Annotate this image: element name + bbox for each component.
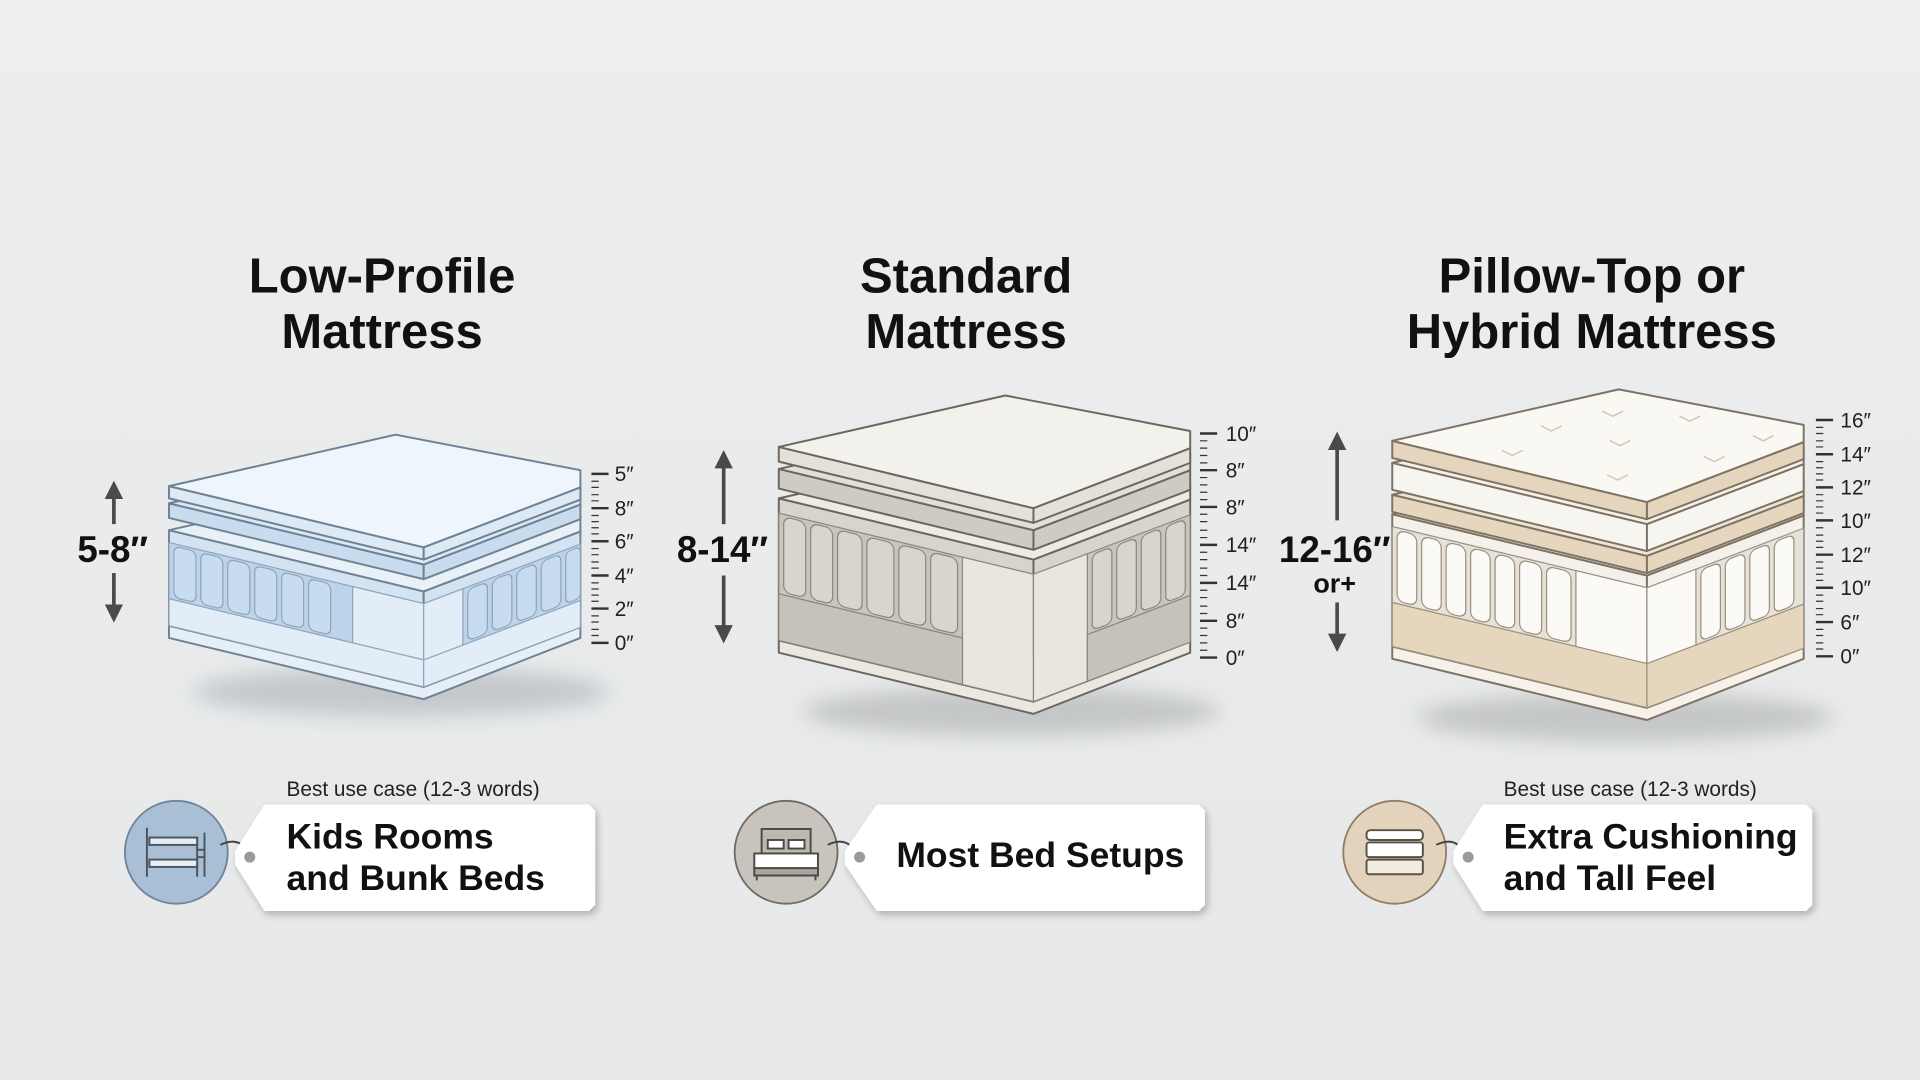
title: Low-Profile Mattress: Low-Profile bbox=[249, 250, 515, 304]
height label: 12-16 or+ bbox=[1279, 441, 1390, 643]
title: Low-Profile Mattress: Mattress bbox=[281, 305, 483, 359]
ruler: low-profile: 5″ bbox=[615, 463, 634, 486]
ruler: low-profile bbox=[591, 463, 634, 655]
icon: bunk bed circle bbox=[125, 801, 250, 904]
mattress: standard (gray) bbox=[779, 396, 1220, 736]
ruler: standard: 10″ bbox=[1226, 423, 1256, 446]
ruler: pillow-top: 10″ bbox=[1840, 510, 1871, 533]
mattress: pillow-top hybrid (cream) bbox=[1392, 389, 1833, 742]
title: Low-Profile Mattress bbox=[249, 250, 515, 359]
tag: Kids Rooms and Bunk Beds bbox=[125, 801, 595, 911]
ruler: pillow-top: 6″ bbox=[1840, 611, 1859, 634]
height label: 8-14: 8-14″ bbox=[677, 529, 768, 570]
tag: Kids Rooms and Bunk Beds: and Bunk Beds bbox=[287, 858, 545, 898]
tag: Most Bed Setups: Most Bed Setups bbox=[896, 835, 1184, 875]
caption: best use case (right): Best use case (12-3 words) bbox=[1504, 778, 1757, 801]
ruler: standard: 8″ bbox=[1226, 460, 1245, 483]
ruler: standard: 14″ bbox=[1226, 572, 1256, 595]
tag: Most Bed Setups bbox=[735, 801, 1205, 911]
ruler: standard: 8″ bbox=[1226, 496, 1245, 519]
title: Pillow-Top or Hybrid Mattress bbox=[1407, 250, 1777, 359]
tag: Extra Cushioning and Tall Feel: and Tall Feel bbox=[1504, 858, 1716, 898]
title: Standard Mattress: Standard bbox=[860, 250, 1072, 304]
ruler: standard bbox=[1200, 423, 1256, 670]
ruler: low-profile: 8″ bbox=[615, 498, 634, 521]
mattress: low-profile (blue) bbox=[169, 435, 610, 716]
ruler: low-profile: 6″ bbox=[615, 531, 634, 554]
ruler: pillow-top: 12″ bbox=[1840, 477, 1871, 500]
ruler: low-profile: 0″ bbox=[615, 632, 634, 655]
tag: Kids Rooms and Bunk Beds: Kids Rooms bbox=[287, 817, 494, 857]
ruler: standard: 0″ bbox=[1226, 647, 1245, 670]
ruler: low-profile: 4″ bbox=[615, 565, 634, 588]
ruler: standard: 8″ bbox=[1226, 610, 1245, 633]
tag: Extra Cushioning and Tall Feel: Extra Cushioning bbox=[1504, 817, 1798, 857]
height label: 12-16 or+: or+ bbox=[1313, 569, 1356, 599]
title: Standard Mattress bbox=[860, 250, 1072, 359]
title: Pillow-Top or Hybrid Mattress: Hybrid Mattress bbox=[1407, 305, 1777, 359]
ruler: pillow-top bbox=[1816, 409, 1871, 669]
ruler: pillow-top: 10″ bbox=[1840, 577, 1871, 600]
ruler: pillow-top: 12″ bbox=[1840, 544, 1871, 567]
icon: bed circle bbox=[735, 801, 857, 904]
height label: 5-8: 5-8″ bbox=[77, 529, 148, 570]
caption: best use case (left): Best use case (12-3 words) bbox=[287, 778, 540, 801]
height label: 5-8 bbox=[77, 490, 148, 613]
title: Standard Mattress: Mattress bbox=[865, 305, 1067, 359]
title: Pillow-Top or Hybrid Mattress: Pillow-Top or bbox=[1439, 250, 1745, 304]
icon: stacked mattress circle bbox=[1343, 801, 1466, 904]
tag: Extra Cushioning and Tall Feel bbox=[1343, 801, 1812, 911]
ruler: low-profile: 2″ bbox=[615, 598, 634, 621]
ruler: standard: 14″ bbox=[1226, 534, 1256, 557]
height label: 12-16 or+: 12-16″ bbox=[1279, 529, 1390, 570]
ruler: pillow-top: 14″ bbox=[1840, 444, 1871, 467]
ruler: pillow-top: 16″ bbox=[1840, 409, 1871, 432]
ruler: pillow-top: 0″ bbox=[1840, 646, 1859, 669]
